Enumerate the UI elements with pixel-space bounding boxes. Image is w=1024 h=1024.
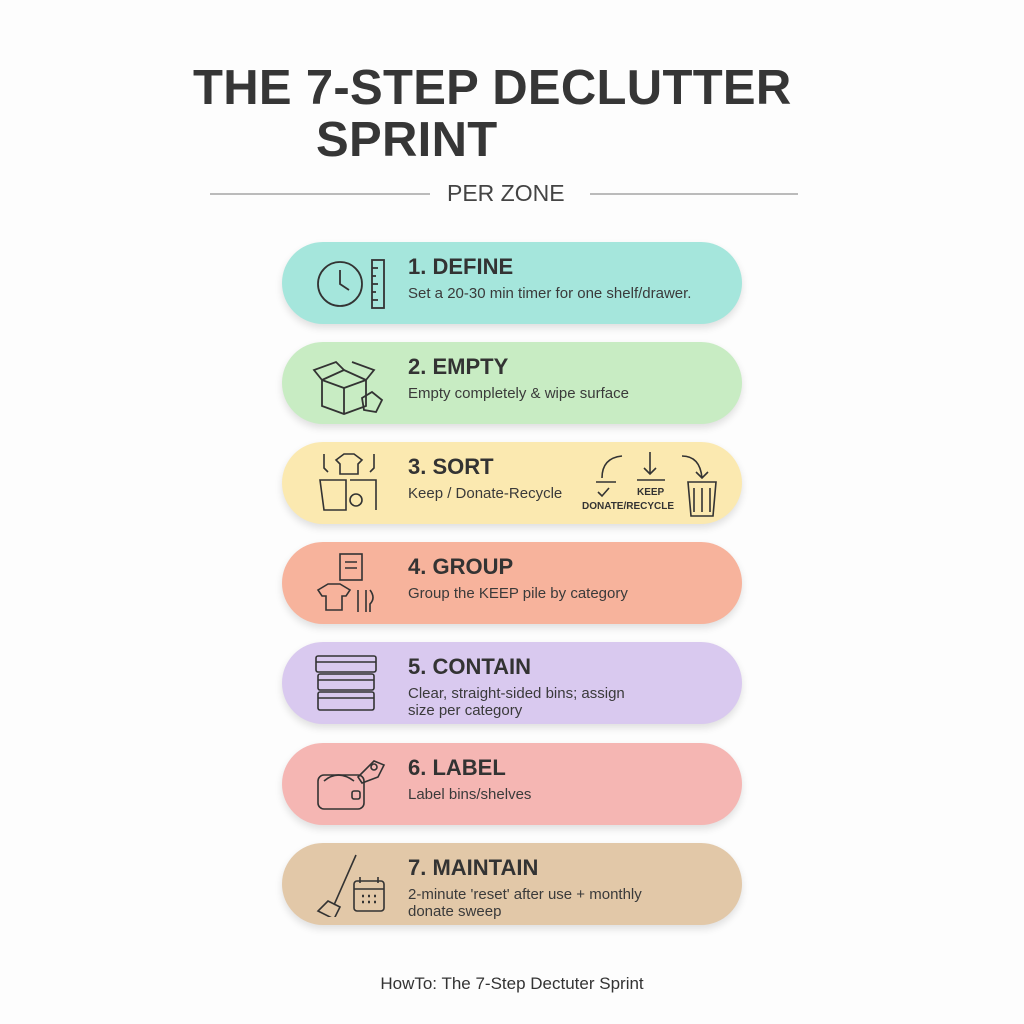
card: define: 1. DEFINE bbox=[408, 254, 513, 279]
title: THE 7-STEP DECLUTTER bbox=[193, 61, 792, 115]
card: contain: Clear, straight-sided bins; assign bbox=[408, 685, 625, 702]
icon: sort bins bbox=[319, 453, 377, 511]
card: empty: Empty completely & wipe surface bbox=[408, 385, 629, 402]
card: sort: 3. SORT bbox=[408, 454, 494, 479]
title line 2: SPRINT bbox=[316, 113, 497, 167]
card: empty: 2. EMPTY bbox=[408, 354, 508, 379]
card: sort: Keep / Donate-Recycle bbox=[408, 485, 562, 502]
card: define bbox=[282, 242, 742, 324]
card: group bbox=[282, 542, 742, 624]
icon: label maker bbox=[317, 760, 385, 810]
icon: clock and ruler bbox=[317, 259, 385, 309]
card: empty bbox=[282, 342, 742, 424]
card: define: Set a 20-30 min timer for one shelf/drawer. bbox=[408, 285, 691, 302]
card: label: Label bins/shelves bbox=[408, 786, 531, 803]
card: maintain: donate sweep bbox=[408, 903, 501, 920]
card: contain: 5. CONTAIN bbox=[408, 654, 531, 679]
card: label bbox=[282, 743, 742, 825]
card: maintain bbox=[282, 843, 742, 925]
card: contain bbox=[282, 642, 742, 724]
card: maintain: 2-minute 'reset' after use + monthly bbox=[408, 886, 642, 903]
icon: sort arrows bbox=[582, 452, 717, 517]
icon: sort arrows: KEEP bbox=[637, 487, 664, 498]
footer: HowTo: The 7-Step Dectuter Sprint bbox=[380, 974, 644, 993]
card: group: Group the KEEP pile by category bbox=[408, 585, 628, 602]
icon: box bbox=[312, 361, 384, 415]
card: sort bbox=[282, 442, 742, 524]
icon: stacked bins bbox=[315, 655, 377, 711]
icon: book shirt utensils bbox=[316, 553, 374, 612]
subtitle: PER ZONE bbox=[447, 180, 565, 206]
card: contain: size per category bbox=[408, 702, 522, 719]
icon: broom calendar bbox=[316, 854, 385, 917]
icon: sort arrows: DONATE/RECYCLE bbox=[582, 501, 674, 512]
card: label: 6. LABEL bbox=[408, 755, 506, 780]
card: group: 4. GROUP bbox=[408, 554, 513, 579]
card: maintain: 7. MAINTAIN bbox=[408, 855, 538, 880]
